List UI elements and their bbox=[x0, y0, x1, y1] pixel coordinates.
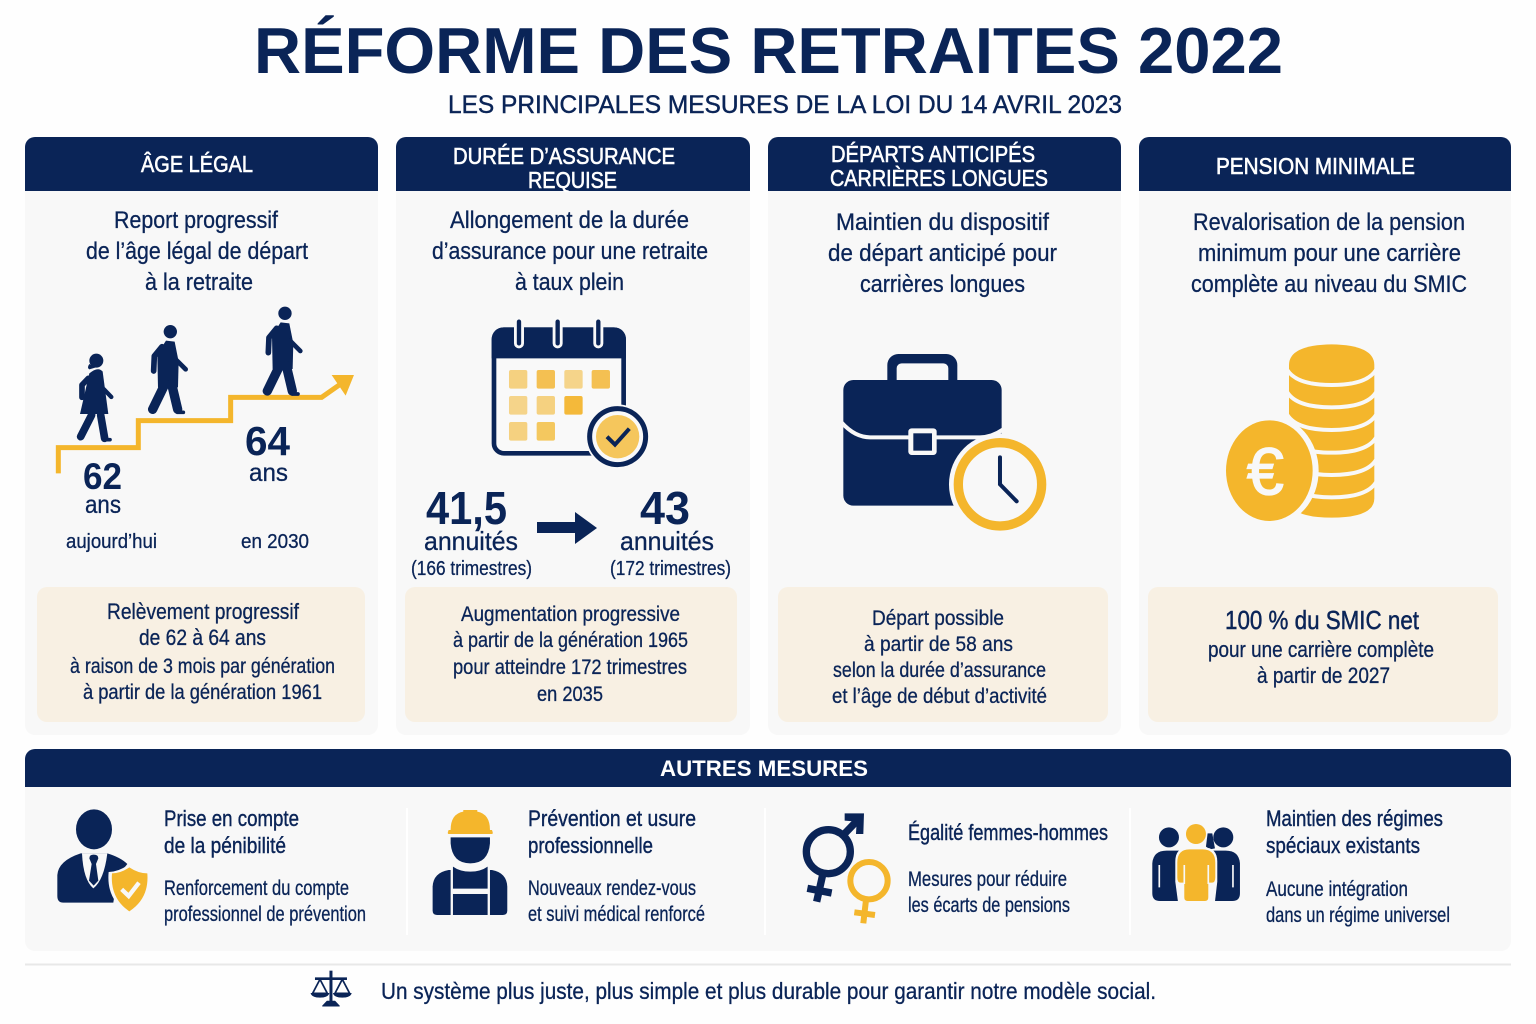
figure: 64 ans bbox=[245, 418, 290, 487]
text: régimes spéciaux bbox=[1266, 806, 1450, 927]
callout: à partir de 58 ans bbox=[864, 633, 1013, 656]
icon: person with shield bbox=[57, 809, 151, 914]
text: égalité bbox=[908, 820, 1108, 917]
panel header bbox=[1139, 137, 1511, 191]
callout: Relèvement progressif bbox=[107, 599, 300, 624]
callout: à partir de la génération 1961 bbox=[83, 681, 322, 704]
panel header bbox=[396, 137, 750, 193]
description bbox=[432, 207, 708, 296]
description: Allongement de la durée bbox=[450, 207, 689, 234]
description bbox=[1191, 209, 1467, 298]
callout bbox=[1148, 587, 1498, 722]
callout: à raison de 3 mois par génération bbox=[70, 655, 335, 678]
icon: calendar with check bbox=[492, 322, 650, 469]
panel background bbox=[768, 137, 1121, 735]
icon: gender symbols bbox=[806, 813, 888, 923]
title: RÉFORME DES RETRAITES 2022 bbox=[254, 14, 1283, 87]
figure: 43 annuités: 43 bbox=[640, 482, 690, 534]
panel header bbox=[25, 137, 378, 191]
text: pénibilité bbox=[164, 806, 366, 926]
panel header: DÉPARTS ANTICIPÉS bbox=[831, 141, 1035, 167]
panel: âge légal bbox=[25, 137, 378, 735]
subtitle: LES PRINCIPALES MESURES DE LA LOI DU 14 AVRIL 2023 bbox=[448, 91, 1122, 119]
panel: autres mesures bbox=[25, 749, 1511, 951]
icon: briefcase with clock bbox=[842, 354, 1051, 535]
figure: 64 ans: ans bbox=[249, 459, 288, 487]
panel header: AUTRES MESURES bbox=[660, 756, 868, 781]
icon: euro coins stack bbox=[1221, 344, 1376, 526]
label: en 2030: en 2030 bbox=[241, 531, 309, 553]
description: complète au niveau du SMIC bbox=[1191, 271, 1467, 298]
panel: durée d'assurance bbox=[396, 137, 750, 735]
panel: départs anticipés bbox=[768, 137, 1121, 735]
description: d’assurance pour une retraite bbox=[432, 238, 708, 265]
text: égalité: Mesures pour réduire bbox=[908, 868, 1067, 891]
text: régimes spéciaux: dans un régime universel bbox=[1266, 904, 1450, 927]
text: prévention: Prévention et usure bbox=[528, 806, 696, 831]
description: à la retraite bbox=[145, 269, 253, 296]
figure: 41,5 annuités: (166 trimestres) bbox=[411, 558, 532, 580]
text: pénibilité: professionnel de prévention bbox=[164, 903, 366, 926]
panel background bbox=[396, 137, 750, 735]
description: carrières longues bbox=[860, 271, 1025, 298]
icon: group of people bbox=[1152, 824, 1240, 902]
callout: à partir de la génération 1965 bbox=[453, 629, 688, 652]
figure: 64 ans: 64 bbox=[245, 418, 290, 464]
description: à taux plein bbox=[515, 269, 624, 296]
text: égalité: Égalité femmes-hommes bbox=[908, 820, 1108, 845]
label: aujourd'hui: aujourd’hui bbox=[66, 531, 157, 553]
panel header bbox=[25, 749, 1511, 787]
description bbox=[828, 209, 1057, 298]
callout: 100 % du SMIC net bbox=[1225, 605, 1420, 635]
icon: scales of justice bbox=[311, 971, 351, 1006]
description: Report progressif bbox=[114, 207, 278, 234]
callout: à partir de 2027 bbox=[1257, 663, 1390, 688]
description: Revalorisation de la pension bbox=[1193, 209, 1465, 236]
text: prévention bbox=[528, 806, 705, 926]
figure: 41,5 annuités: 41,5 bbox=[426, 482, 507, 534]
description bbox=[86, 207, 308, 296]
text: égalité: les écarts de pensions bbox=[908, 894, 1070, 917]
callout: et l’âge de début d’activité bbox=[832, 685, 1047, 708]
panel header: PENSION MINIMALE bbox=[1216, 153, 1415, 179]
text: pénibilité: de la pénibilité bbox=[164, 833, 286, 858]
callout: pour atteindre 172 trimestres bbox=[453, 656, 687, 679]
text: prévention: Nouveaux rendez-vous bbox=[528, 877, 696, 900]
text: régimes spéciaux: Aucune intégration bbox=[1266, 878, 1408, 901]
text: régimes spéciaux: spéciaux existants bbox=[1266, 833, 1420, 858]
callout: pour une carrière complète bbox=[1208, 637, 1434, 662]
figure: 43 annuités: (172 trimestres) bbox=[610, 558, 731, 580]
figure: 41,5 annuités bbox=[411, 482, 532, 580]
callout bbox=[37, 587, 365, 722]
figure: 62 ans: ans bbox=[85, 491, 121, 519]
person: man top bbox=[267, 307, 300, 394]
footer message: Un système plus juste, plus simple et plus durable pour garantir notre modèle social. bbox=[381, 978, 1156, 1004]
panel: pension minimale bbox=[1139, 137, 1511, 735]
panel header: REQUISE bbox=[528, 167, 617, 193]
panel header bbox=[768, 137, 1121, 191]
figure: 41,5 annuités: annuités bbox=[424, 526, 518, 556]
person: woman bbox=[80, 354, 111, 440]
panel background bbox=[25, 137, 378, 735]
text: prévention: et suivi médical renforcé bbox=[528, 903, 705, 926]
callout: Augmentation progressive bbox=[461, 603, 680, 626]
figure: 43 annuités bbox=[610, 482, 731, 580]
panel background bbox=[25, 749, 1511, 951]
callout: de 62 à 64 ans bbox=[139, 625, 266, 650]
text: prévention: professionnelle bbox=[528, 833, 653, 858]
callout bbox=[405, 587, 737, 722]
text: régimes spéciaux: Maintien des régimes bbox=[1266, 806, 1443, 831]
description: minimum pour une carrière bbox=[1198, 240, 1461, 267]
description: Maintien du dispositif bbox=[836, 209, 1049, 236]
panel header: ÂGE LÉGAL bbox=[141, 151, 253, 177]
description: de l’âge légal de départ bbox=[86, 238, 308, 265]
description: de départ anticipé pour bbox=[828, 240, 1057, 267]
icon: staircase with walking people bbox=[58, 307, 354, 473]
figure: 43 annuités: annuités bbox=[620, 526, 714, 556]
panel header: CARRIÈRES LONGUES bbox=[830, 165, 1048, 191]
figure: 62 ans bbox=[83, 456, 122, 519]
euro sign: € bbox=[1247, 435, 1284, 509]
callout: selon la durée d’assurance bbox=[833, 659, 1046, 682]
arrow bbox=[537, 512, 597, 544]
panel header: DURÉE D’ASSURANCE bbox=[453, 143, 675, 169]
callout: en 2035 bbox=[537, 683, 603, 706]
icon: worker with helmet bbox=[433, 810, 507, 915]
text: pénibilité: Renforcement du compte bbox=[164, 877, 349, 900]
figure: 62 ans: 62 bbox=[83, 456, 122, 497]
panel background bbox=[1139, 137, 1511, 735]
callout bbox=[778, 587, 1108, 722]
callout: Départ possible bbox=[872, 607, 1004, 630]
person: man middle bbox=[153, 325, 186, 412]
text: pénibilité: Prise en compte bbox=[164, 806, 299, 831]
